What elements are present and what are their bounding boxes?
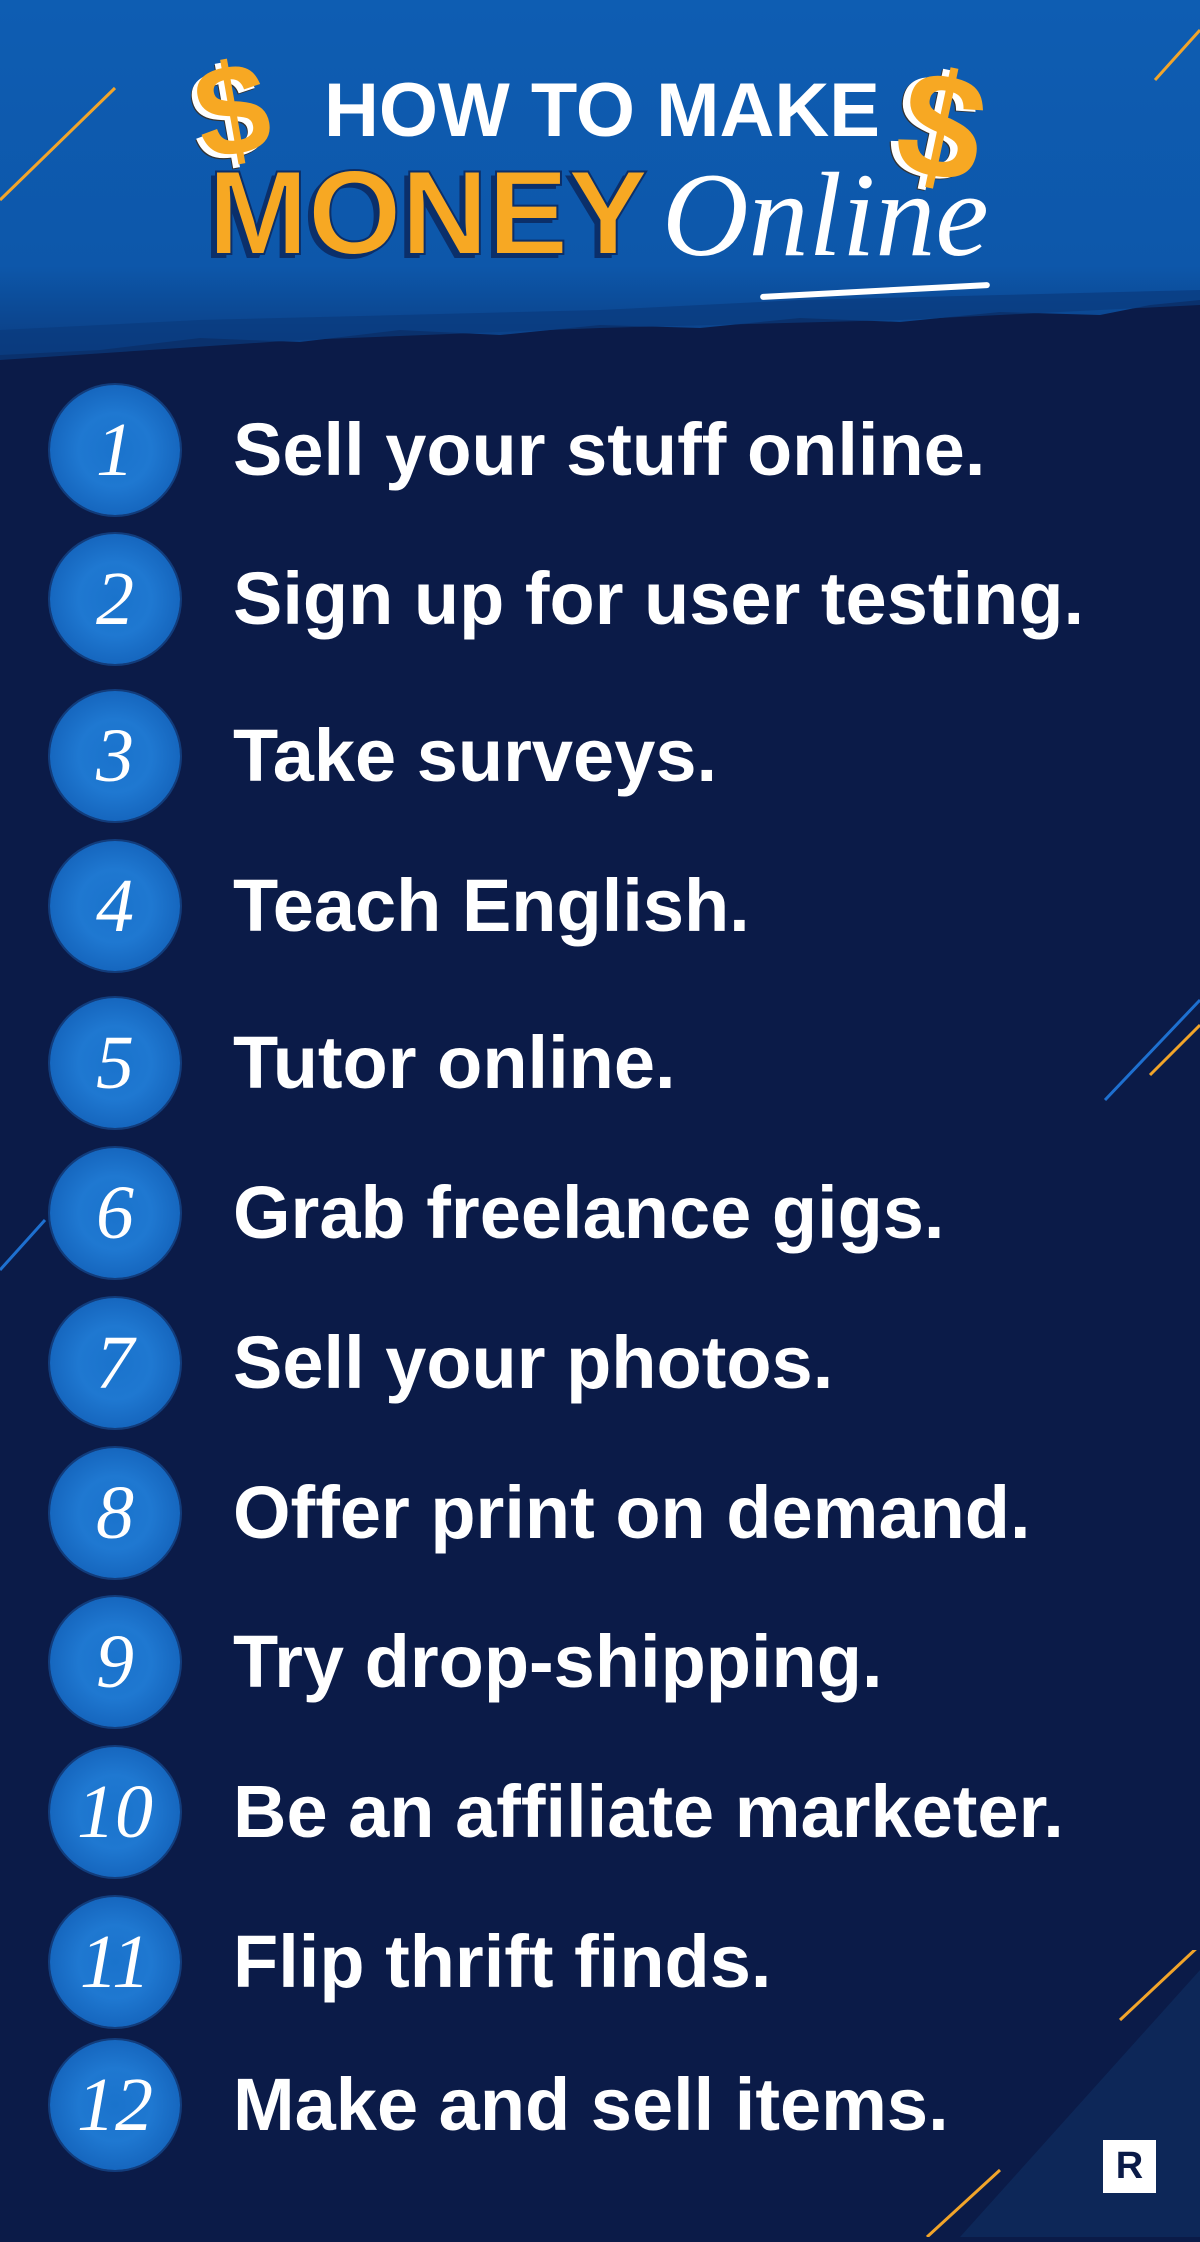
item 10: [48, 1745, 1064, 1879]
item 8: Offer print on demand.: [233, 1471, 1031, 1554]
item 7: Sell your photos.: [233, 1321, 833, 1404]
item 1: [48, 383, 985, 517]
item 2: [48, 532, 1084, 666]
title: [208, 68, 990, 300]
item 3: 3: [96, 714, 134, 798]
item 11: 11: [80, 1920, 150, 2004]
item 4: 4: [96, 864, 134, 948]
item 5: [48, 996, 676, 1130]
icon: dollar left: $: [184, 32, 280, 188]
item 3: [48, 689, 717, 823]
item 6: 6: [96, 1171, 134, 1255]
item 8: [48, 1446, 1031, 1580]
item 1: Sell your stuff online.: [233, 408, 985, 491]
title: MONEY: MONEY: [208, 146, 648, 280]
item 12: Make and sell items.: [233, 2063, 949, 2146]
item 9: Try drop-shipping.: [233, 1620, 883, 1703]
item 7: [48, 1296, 833, 1430]
item 10: 10: [77, 1770, 153, 1854]
item 5: Tutor online.: [233, 1021, 676, 1104]
decorative side lines: [0, 999, 1200, 1271]
decorative corner: [926, 1950, 1200, 2237]
item 7: 7: [96, 1321, 134, 1405]
item 2: Sign up for user testing.: [233, 557, 1084, 640]
logo: R: [1116, 2145, 1143, 2187]
item 12: 12: [77, 2063, 153, 2147]
item 6: [48, 1146, 944, 1280]
item 1: 1: [96, 408, 134, 492]
item 8: 8: [96, 1471, 134, 1555]
item 10: Be an affiliate marketer.: [233, 1770, 1064, 1853]
header band: [0, 0, 1200, 360]
item 4: Teach English.: [233, 864, 750, 947]
item 5: 5: [96, 1021, 134, 1105]
item 6: Grab freelance gigs.: [233, 1171, 944, 1254]
item 11: Flip thrift finds.: [233, 1920, 771, 2003]
item 3: Take surveys.: [233, 714, 717, 797]
logo: [1103, 2140, 1156, 2193]
item 9: 9: [96, 1620, 134, 1704]
item 11: [48, 1895, 771, 2029]
title: Online script: Online: [662, 148, 989, 281]
item 2: 2: [96, 557, 134, 641]
item 9: [48, 1595, 883, 1729]
icon: dollar right: $: [884, 35, 1000, 217]
item 4: [48, 839, 750, 973]
item 12: [48, 2038, 949, 2172]
title line 1: HOW TO MAKE: [324, 68, 880, 153]
title: swoosh underline: [760, 282, 990, 300]
